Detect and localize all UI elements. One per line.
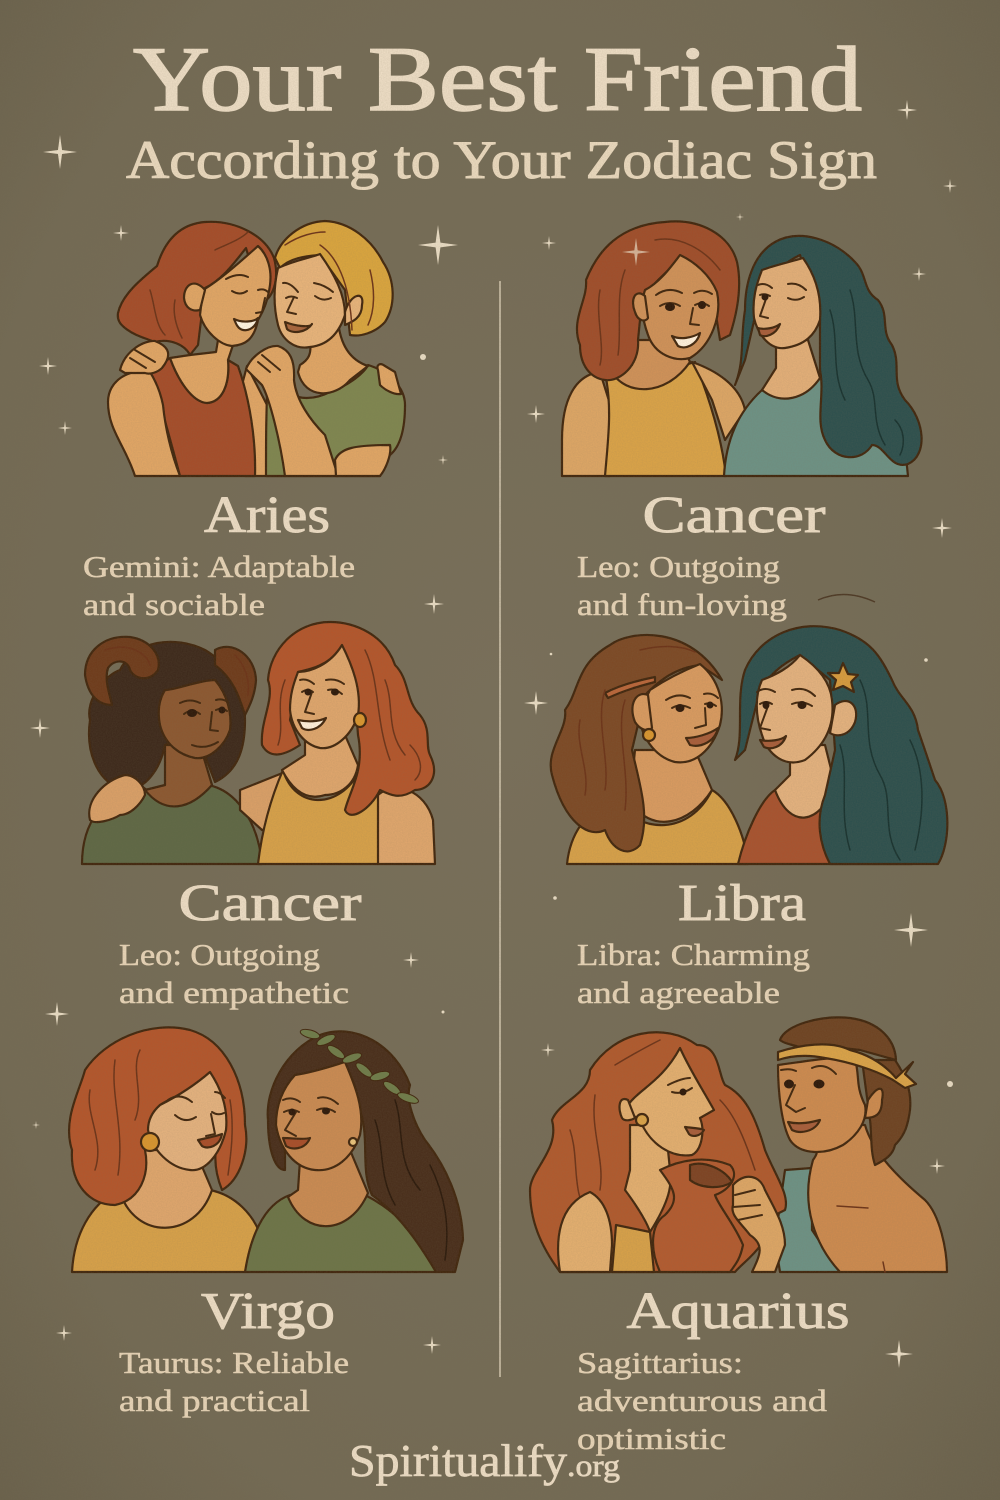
text: Libra friend: Libra: Charming — [577, 937, 810, 972]
text: Virgo friend: Taurus: Reliable — [119, 1345, 349, 1380]
text: Aquarius friend: adventurous and — [577, 1383, 828, 1418]
text: Aries friend: Gemini: Adaptable — [83, 549, 355, 584]
text: Aquarius friend: optimistic — [577, 1421, 726, 1456]
heading: Cancer middle: Cancer — [178, 875, 362, 932]
text: Cancer middle friend — [119, 937, 349, 1010]
heading: Virgo: Virgo — [201, 1283, 335, 1340]
text: Cancer middle friend: and empathetic — [119, 975, 349, 1010]
text: Aries friend: and sociable — [83, 587, 265, 622]
text: Cancer top friend: Leo: Outgoing — [577, 549, 780, 584]
illustration: Aries friends — [108, 221, 405, 476]
illustration: Cancer friends top — [562, 221, 922, 476]
center divider — [499, 281, 501, 1377]
illustration: Cancer friends middle — [82, 622, 435, 864]
text: Cancer top friend — [577, 549, 787, 622]
illustration: Virgo friends — [69, 1027, 463, 1272]
text: Cancer top friend: and fun-loving — [577, 587, 787, 622]
illustration: Aquarius friends — [530, 1017, 947, 1272]
heading: Aries: Aries — [204, 487, 330, 544]
text: Libra friend: and agreeable — [577, 975, 780, 1010]
text: Libra friend — [577, 937, 810, 1010]
heading: Cancer top: Cancer — [642, 487, 826, 544]
illustration: Libra friends — [551, 626, 947, 864]
decorative stars — [30, 100, 957, 1368]
brand logo: .org — [567, 1448, 620, 1483]
text: Cancer middle friend: Leo: Outgoing — [119, 937, 320, 972]
title: Your Best Friend — [133, 28, 862, 130]
text: Aquarius friend: Sagittarius: — [577, 1345, 743, 1380]
subtitle: According to Your Zodiac Sign — [126, 130, 877, 190]
heading: Libra: Libra — [678, 875, 806, 932]
text: Virgo friend: and practical — [119, 1383, 310, 1418]
brand logo: Spiritualify — [349, 1435, 567, 1486]
text: Aries friend — [83, 549, 355, 622]
text: Virgo friend — [119, 1345, 349, 1418]
heading: Aquarius: Aquarius — [626, 1283, 850, 1340]
text: Aquarius friend — [577, 1345, 828, 1456]
